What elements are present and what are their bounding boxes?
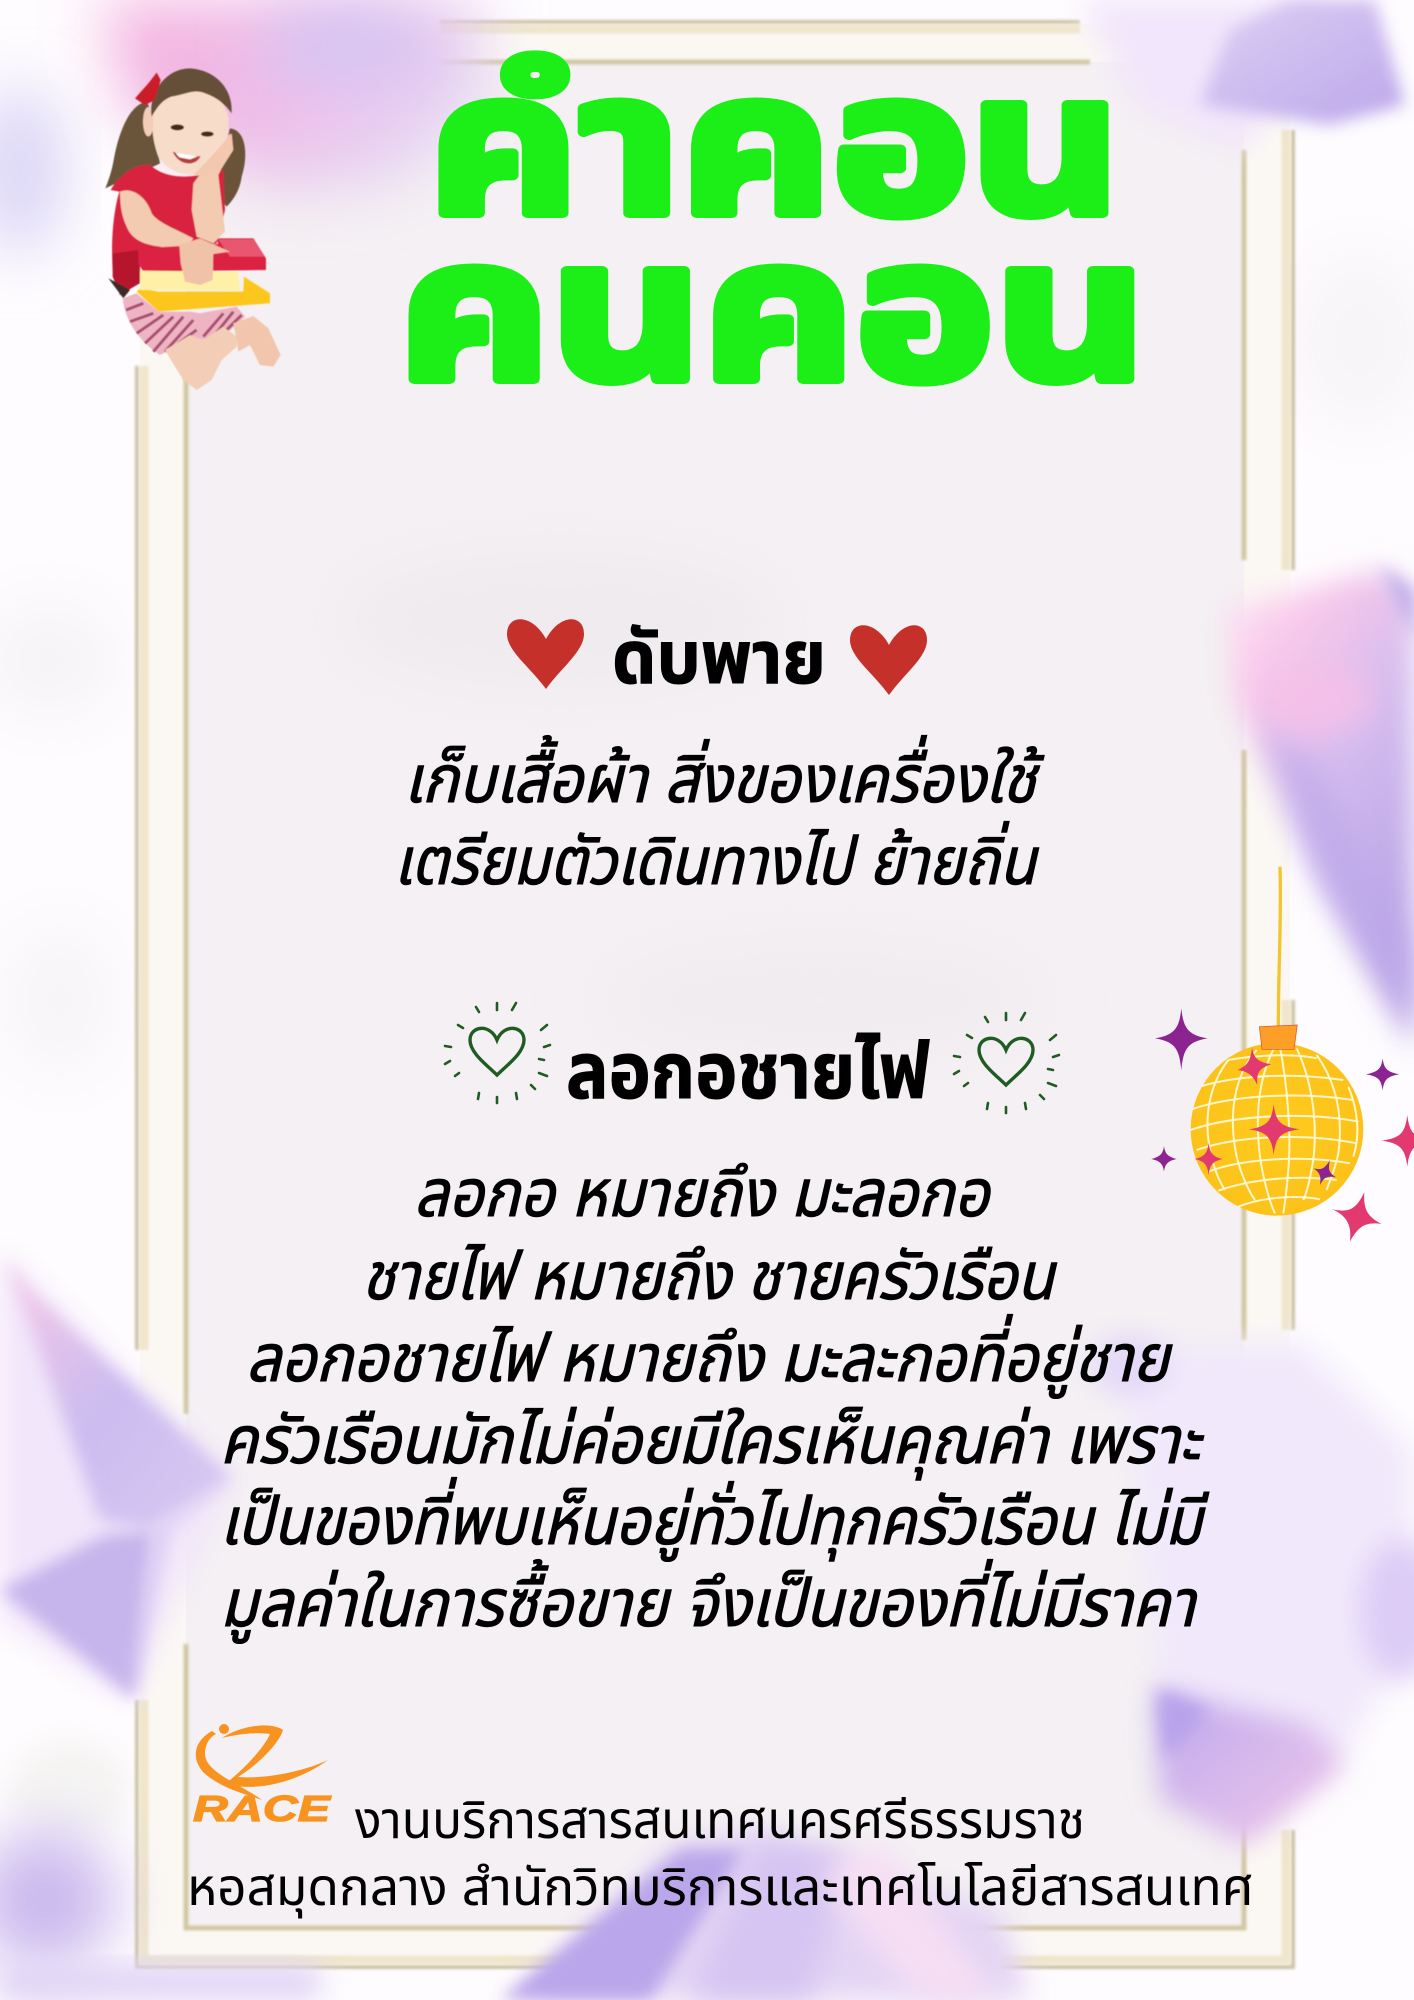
heading text: ดับพาย	[612, 616, 826, 699]
inner panel	[186, 62, 1244, 1928]
feet	[165, 327, 237, 390]
mouth	[173, 152, 201, 164]
text block: verse two: ครัวเรือนมักไม่ค่อยมีใครเห็นคุณค่า เพราะ	[220, 1403, 1204, 1481]
hair top	[151, 68, 232, 117]
footer text	[187, 1792, 1254, 1919]
petal: left lower	[0, 1250, 232, 1700]
text block: verse two: ลอกอ หมายถึง มะลอกอ	[414, 1156, 991, 1230]
heading: ดับพาย with red hearts	[507, 616, 927, 699]
footer text: หอสมุดกลาง สำนักวิทบริการและเทศโนโลยีสารสนเทศ	[187, 1859, 1254, 1919]
ponytails	[105, 102, 160, 188]
hand on cheek	[193, 133, 233, 175]
head	[152, 88, 228, 175]
petal: bottom centre	[500, 1830, 1030, 2000]
logo wordmark: RACE	[193, 1788, 331, 1829]
hair flower	[135, 73, 161, 105]
text block: verse one: เตรียมตัวเดินทางไป ย้ายถิ่น	[394, 821, 1039, 898]
text block: verse two: ชายไฟ หมายถึง ชายครัวเรือน	[362, 1239, 1057, 1313]
illustration: girl with books	[105, 68, 281, 390]
text block: verse two: ลอกอชายไฟ หมายถึง มะละกอที่อยู่ชาย	[246, 1314, 1173, 1399]
ball	[1191, 1043, 1363, 1216]
arm	[120, 190, 193, 253]
hand on book	[179, 238, 230, 285]
sparkles	[1151, 1008, 1414, 1242]
logo: RACE	[193, 1724, 331, 1829]
title line 2: คนคอน	[398, 201, 1147, 421]
petal: right lower lavender	[1090, 1335, 1414, 1845]
shirt	[111, 165, 225, 295]
petal: top left pink	[100, 0, 480, 190]
gold frame	[137, 22, 1293, 1967]
footer text: งานบริการสารสนเทศนครศรีธรรมราช	[355, 1792, 1085, 1850]
text block: verse two: เป็นของที่พบเห็นอยู่ทั่วไปทุกครัวเรือน ไม่มี	[220, 1477, 1210, 1562]
icon: red heart left	[507, 619, 584, 689]
heading: ลอกอชายไฟ with green hearts	[445, 1003, 1059, 1115]
icon: red heart right	[850, 625, 927, 695]
ball grid	[1191, 1047, 1358, 1213]
eyes	[171, 124, 184, 130]
cap	[1259, 1025, 1297, 1049]
petal: right middle	[1225, 565, 1414, 1050]
petal: top left lavender	[260, 7, 430, 83]
logo swoosh	[196, 1724, 328, 1800]
petal: top right light	[1080, 0, 1330, 150]
text block: verse one: เก็บเสื้อผ้า สิ่งของเครื่องใช้	[404, 735, 1044, 816]
striped legs	[123, 293, 245, 355]
illustration: disco ball with sparkles	[1151, 867, 1414, 1242]
petal: bottom left	[0, 1830, 320, 2000]
red book	[138, 238, 266, 272]
petal: top right purple	[1200, 0, 1405, 125]
title line 1: คำคอน	[428, 35, 1121, 255]
text block: verse two	[220, 1156, 1210, 1644]
forearm to cheek	[192, 133, 233, 243]
icon: green heart right	[954, 1013, 1059, 1113]
text block: verse two: มูลค่าในการซื้อขาย จึงเป็นของที่ไม่มีราคา	[220, 1559, 1198, 1644]
heading text: ลอกอชายไฟ	[566, 1027, 930, 1115]
text block: verse one	[394, 735, 1044, 898]
ear	[143, 107, 154, 136]
cream book	[140, 271, 240, 291]
yellow book	[137, 277, 270, 312]
string	[1278, 867, 1280, 1027]
icon: green heart left	[445, 1003, 550, 1103]
